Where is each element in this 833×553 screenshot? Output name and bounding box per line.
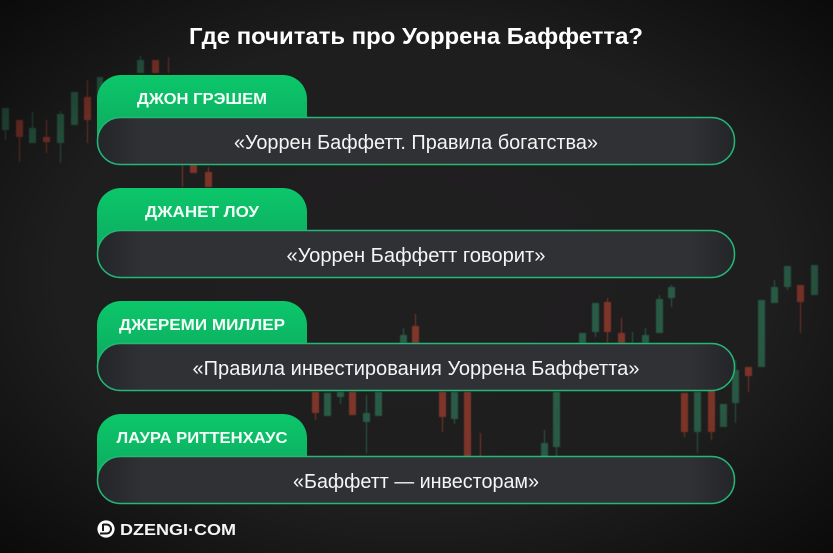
author tab: Джереми Миллер: [97, 301, 307, 366]
icon: dzengi mark: [97, 520, 115, 538]
book pill 4: [98, 456, 734, 504]
candlestick chart backdrop: [2, 56, 818, 457]
author name: Лаура Риттенхаус: ЛАУРА РИТТЕНХАУС: [116, 430, 288, 447]
book pill 1: [98, 118, 734, 164]
author name: Джанет Лоу: ДЖАНЕТ ЛОУ: [145, 204, 260, 221]
title: Где почитать про Уоррена Баффетта?: [189, 23, 643, 49]
author tab: Джанет Лоу: [97, 188, 307, 253]
author name: Джон Грэшем: ДЖОН ГРЭШЕМ: [137, 91, 267, 108]
book pill 2: [98, 230, 734, 278]
card 3: Джереми Миллер: [97, 301, 734, 390]
book pill 3: [98, 344, 734, 390]
book title 4: «Баффетт — инвесторам»: [293, 471, 539, 493]
book title 3: «Правила инвестирования Уоррена Баффетта»: [192, 358, 640, 380]
card 2: Джанет Лоу: [97, 188, 734, 278]
book title 2: «Уоррен Баффетт говорит»: [286, 245, 546, 267]
card 4: Лаура Риттенхаус: [97, 414, 734, 504]
author name: Джереми Миллер: ДЖЕРЕМИ МИЛЛЕР: [119, 317, 285, 334]
author tab: Джон Грэшем: [97, 75, 307, 140]
book title 1: «Уоррен Баффетт. Правила богатства»: [234, 132, 598, 154]
logo: dzengi.com: [97, 520, 236, 539]
wordmark: DZENGI·COM: [120, 522, 236, 539]
author tab: Лаура Риттенхаус: [97, 414, 307, 479]
card 1: Джон Грэшем: [97, 75, 734, 164]
